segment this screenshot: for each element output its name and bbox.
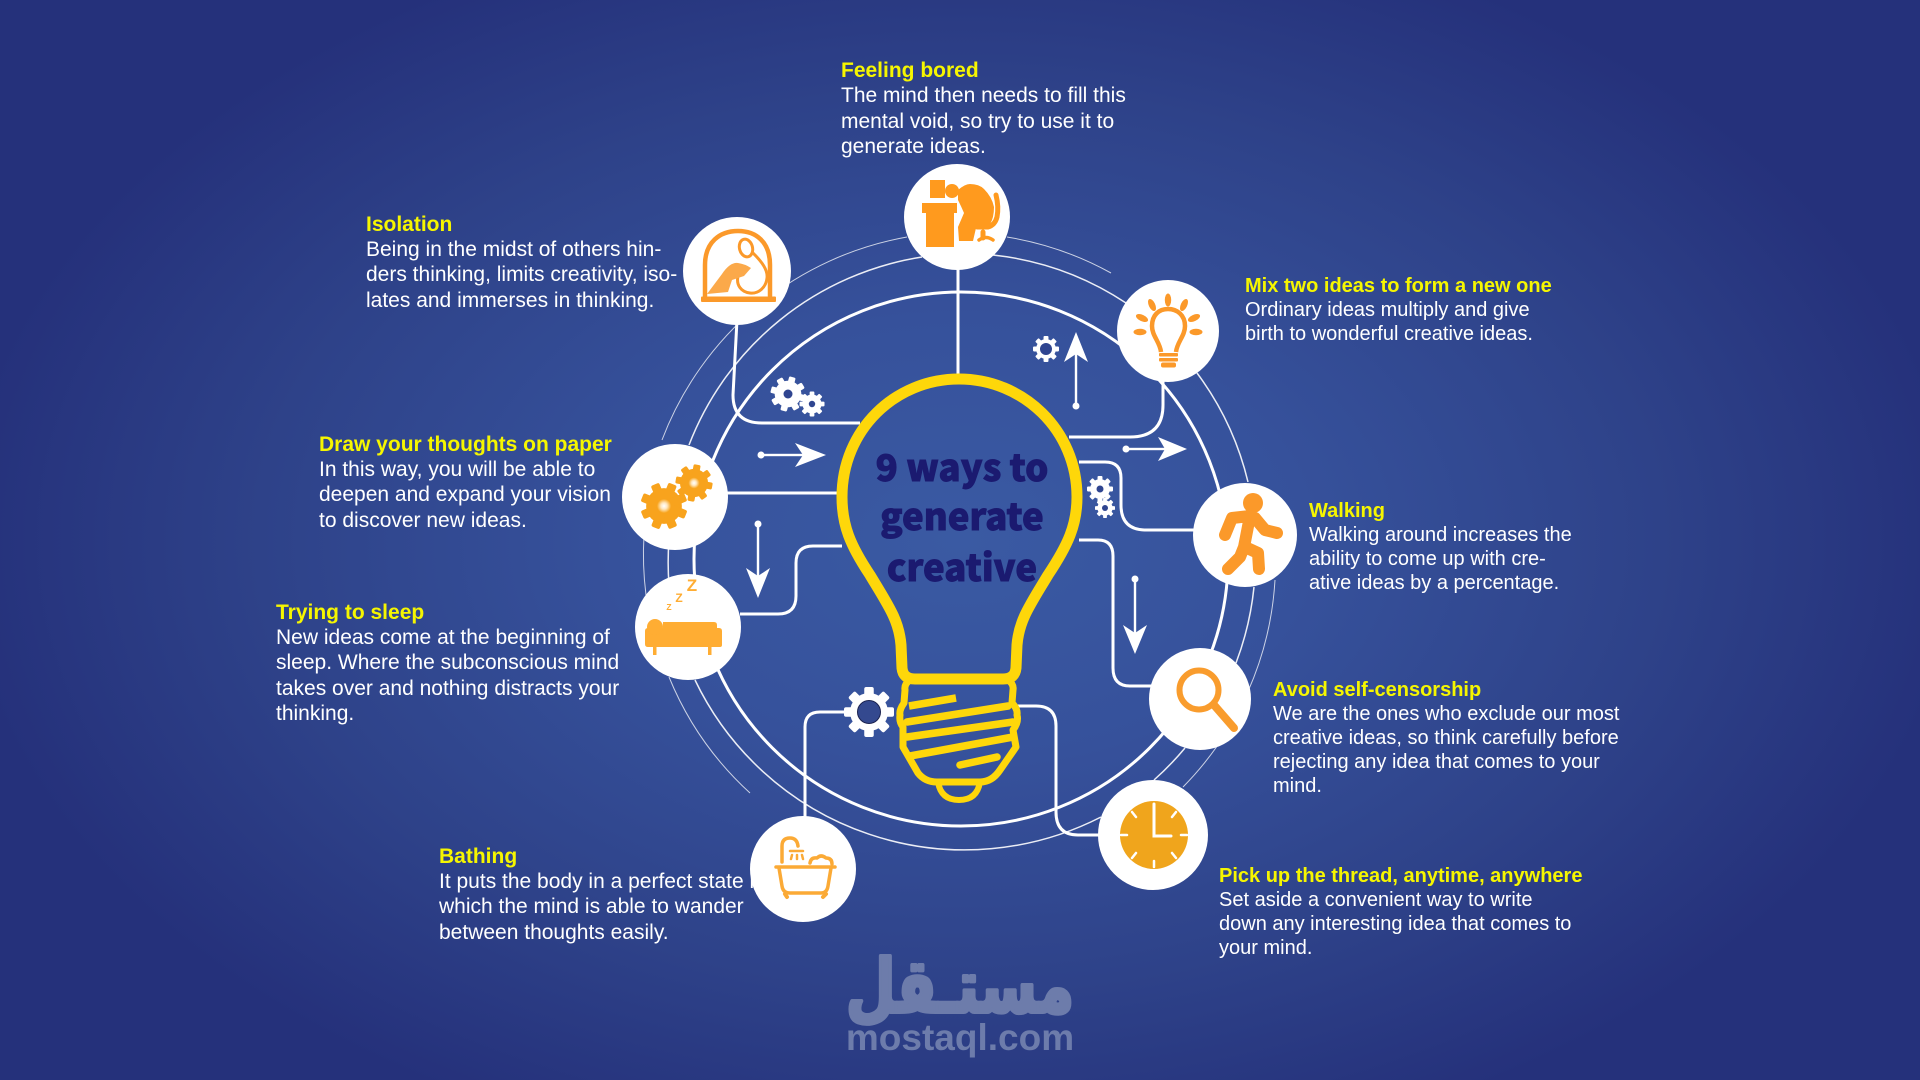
text block: pick up the thread: Set aside a convenient way to write [1219,889,1533,911]
gear: upper right [1033,336,1059,362]
node: trying to sleep [635,574,741,680]
bulb title: generate [880,488,1044,541]
text block: feeling bored: The mind then needs to fill this [841,84,1126,107]
light bulb [842,379,1077,800]
text block: trying to sleep: New ideas come at the beginning of [276,626,610,649]
bulb title: creative [887,539,1037,592]
node: walking [1193,483,1297,587]
text block: trying to sleep: sleep. Where the subconscious mind [276,651,619,674]
icon: sleeping letters: Z [675,591,683,605]
text block: pick up the thread: your mind. [1219,937,1312,959]
concentric rings [643,237,1275,850]
node: mix two ideas [1117,280,1219,382]
text block: pick up the thread [1219,865,1582,959]
text block: mix two ideas: birth to wonderful creative ideas. [1245,323,1533,345]
gears: upper left pair [767,373,824,416]
gears: right pair [1087,476,1115,518]
text block: feeling bored: mental void, so try to use it to [841,110,1114,133]
arrow: right right side [1122,437,1187,461]
text block: draw your thoughts: deepen and expand your vision [319,483,611,506]
icon: sleeping letters [666,576,697,612]
icon: sleeping letters: Z [666,602,672,612]
watermark logo: mostaql.com [846,1017,1074,1058]
text block: isolation [366,213,677,312]
text block: draw your thoughts [319,433,612,532]
node: bathing [750,816,856,922]
text block: pick up the thread: Pick up the thread, anytime, anywhere [1219,865,1582,887]
text block: mix two ideas: Mix two ideas to form a new one [1245,275,1552,297]
text block: avoid self-censorship: Avoid self-censorship [1273,679,1481,701]
arrow: right left side [758,443,826,467]
watermark logo [846,944,1074,1058]
text block: trying to sleep: thinking. [276,702,354,725]
node: pick up the thread [1098,780,1208,890]
text block: avoid self-censorship: creative ideas, so think carefully before [1273,727,1619,749]
text block: draw your thoughts: to discover new ideas. [319,509,527,532]
connector lines [726,265,1195,835]
arrow: down left side [746,520,770,598]
text block: mix two ideas [1245,275,1552,345]
text block: trying to sleep [276,601,619,725]
text block: trying to sleep: takes over and nothing distracts your [276,677,619,700]
text block: draw your thoughts: Draw your thoughts on paper [319,433,612,456]
text block: mix two ideas: Ordinary ideas multiply and give [1245,299,1530,321]
text block: walking [1309,500,1572,594]
watermark logo: مستـقل [846,944,1074,1030]
text block: isolation: ders thinking, limits creativity, iso- [366,263,677,286]
node: feeling bored [904,164,1010,270]
text block: bathing: Bathing [439,845,517,868]
arrow: up [1064,332,1088,410]
text block: walking: ability to come up with cre- [1309,548,1546,570]
icon: sleeping letters: Z [687,576,697,595]
text block: avoid self-censorship: rejecting any idea that comes to your [1273,751,1600,773]
text block: feeling bored [841,59,1126,158]
text block: walking: ative ideas by a percentage. [1309,572,1559,594]
text block: trying to sleep: Trying to sleep [276,601,424,624]
gear: large bottom [844,687,894,737]
text block: bathing: It puts the body in a perfect state in [439,870,766,893]
text block: walking: Walking around increases the [1309,524,1572,546]
text block: feeling bored: Feeling bored [841,59,979,82]
text block: bathing [439,845,766,944]
text block: feeling bored: generate ideas. [841,135,986,158]
text block: draw your thoughts: In this way, you will be able to [319,458,595,481]
text block: avoid self-censorship [1273,679,1620,797]
text block: bathing: between thoughts easily. [439,921,669,944]
bulb title: 9 ways to [876,439,1048,492]
arrow: down right side [1123,576,1147,654]
text block: bathing: which the mind is able to wander [439,895,744,918]
text block: isolation: Isolation [366,213,452,236]
text block: isolation: Being in the midst of others hin- [366,238,661,261]
text block: isolation: lates and immerses in thinking. [366,289,654,312]
text block: walking: Walking [1309,500,1385,522]
node: avoid self-censorship [1149,648,1251,750]
bulb title [876,439,1048,592]
text block: avoid self-censorship: We are the ones who exclude our most [1273,703,1619,725]
node: isolation [683,217,791,325]
node: draw your thoughts [622,444,728,550]
text block: pick up the thread: down any interesting idea that comes to [1219,913,1571,935]
text block: avoid self-censorship: mind. [1273,775,1322,797]
